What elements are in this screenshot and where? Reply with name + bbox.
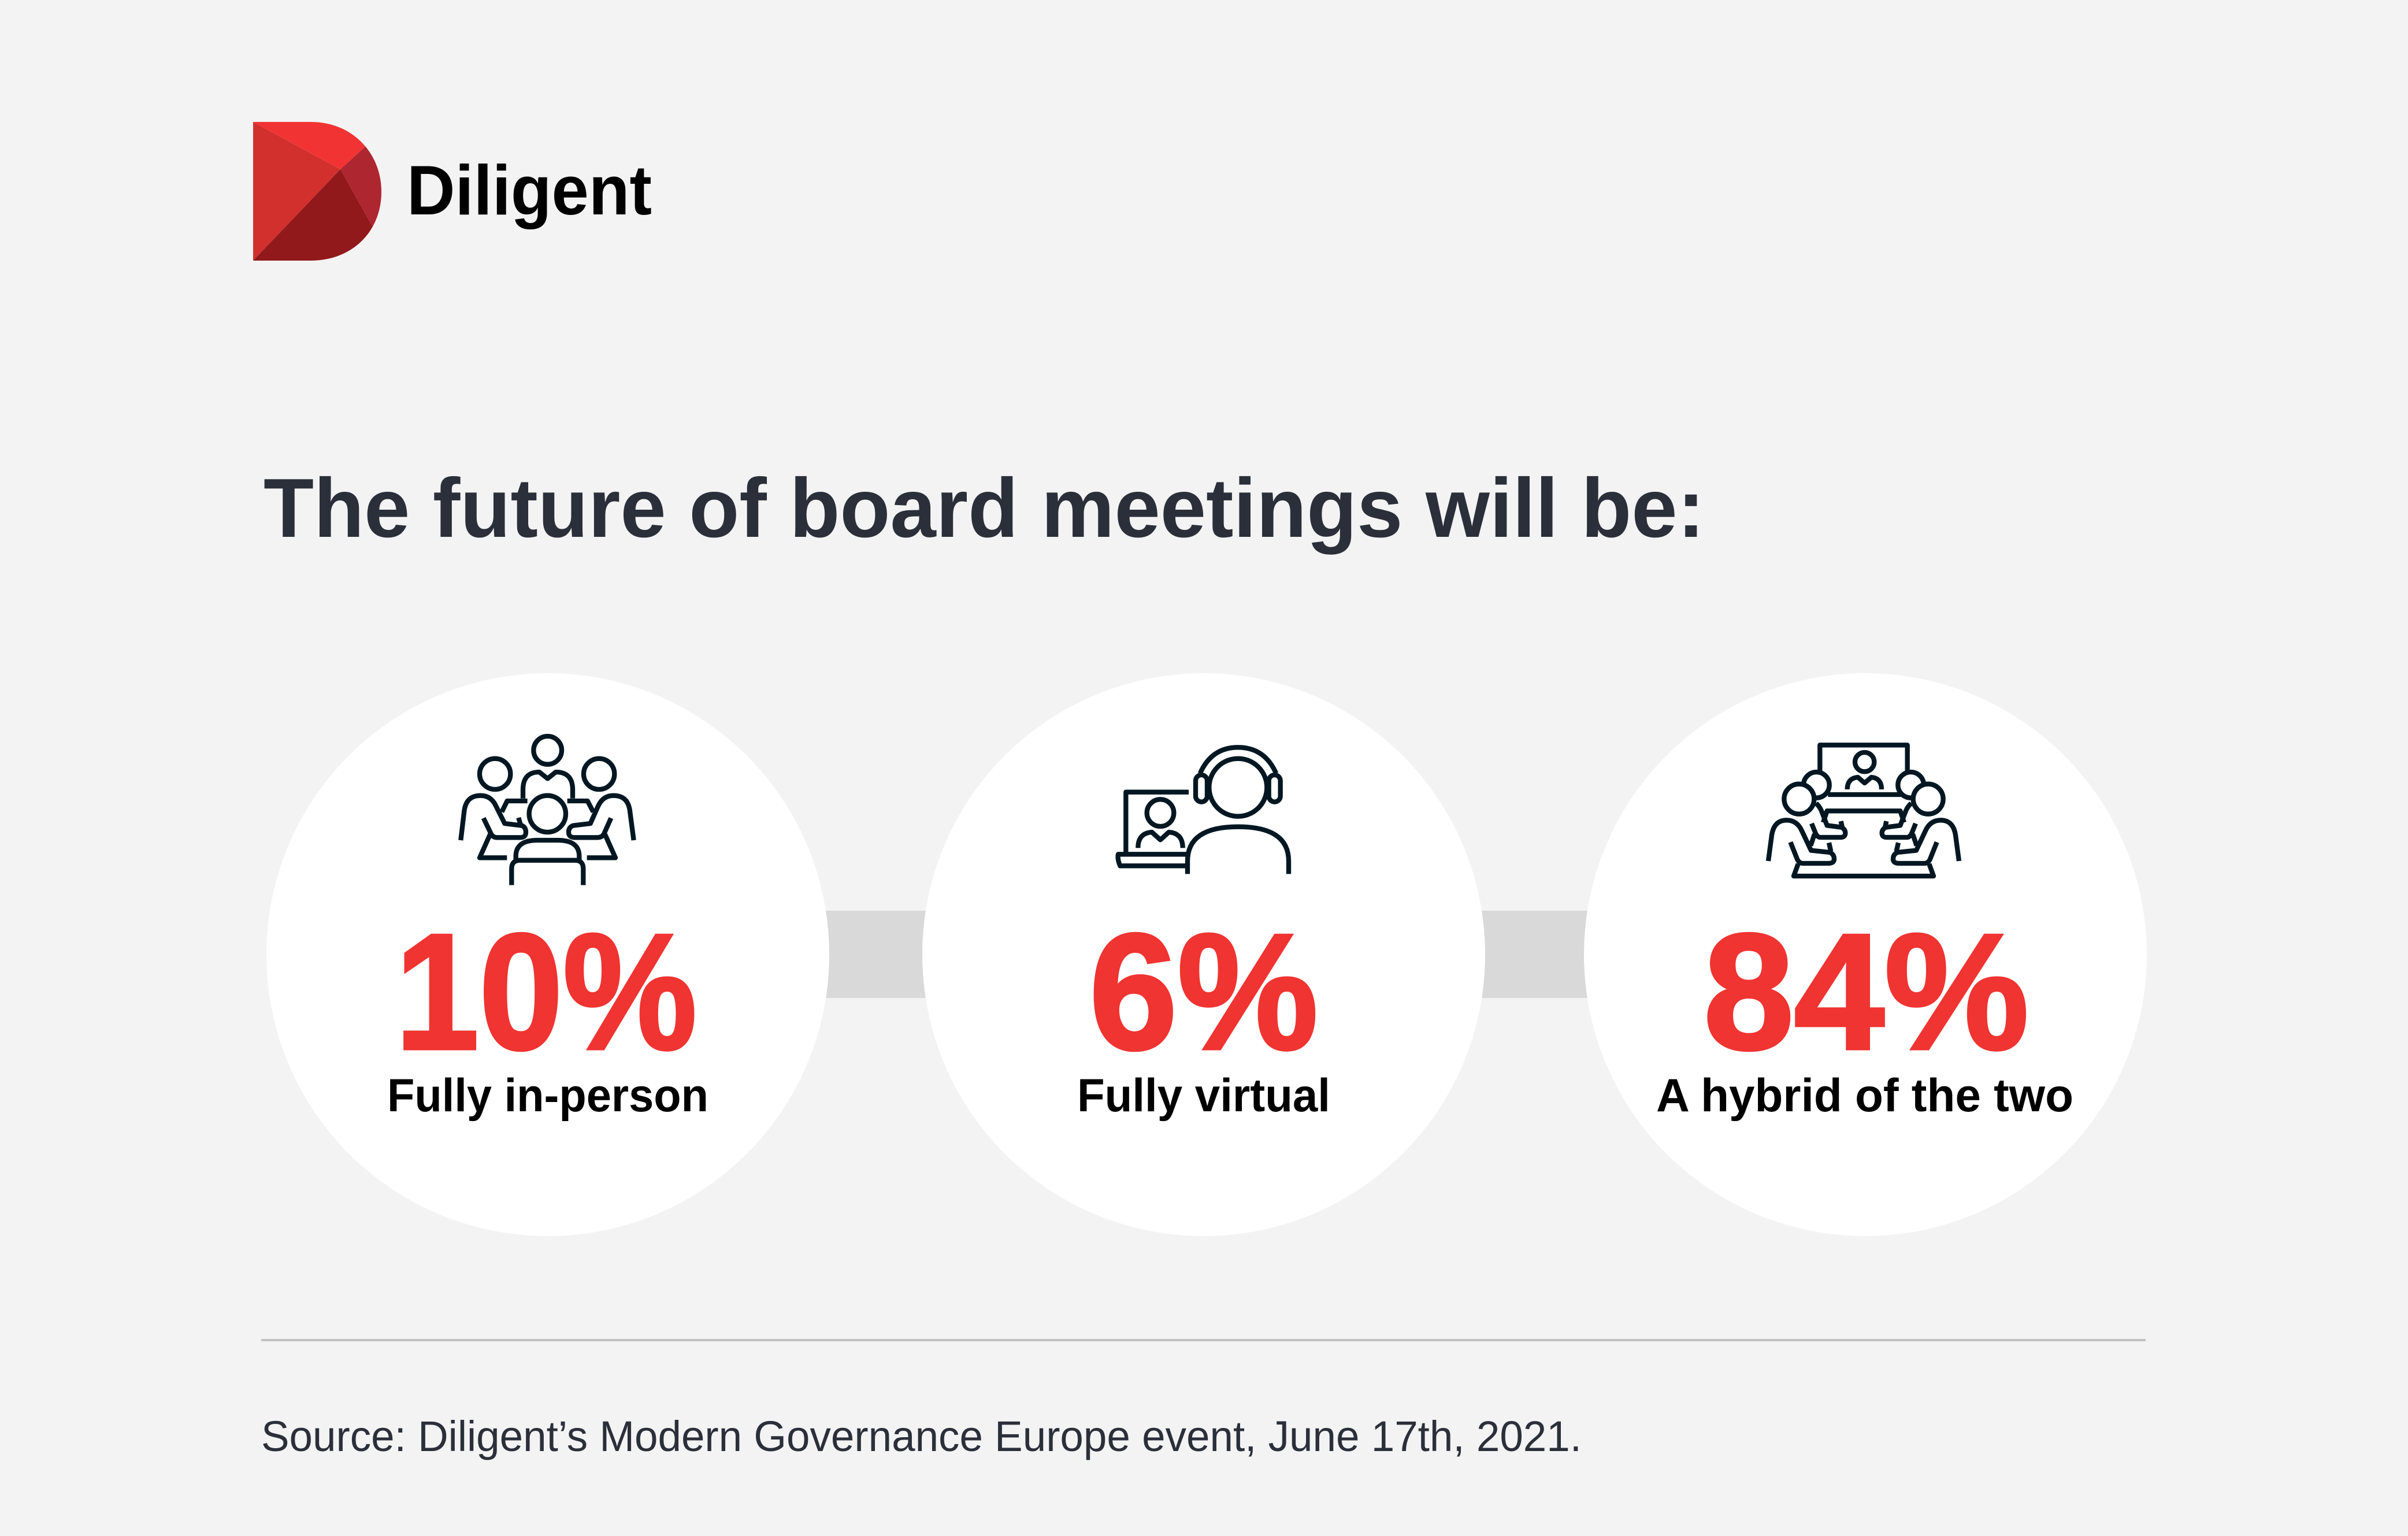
icon: person with headset and laptop <box>1118 747 1289 874</box>
panel: fully in-person <box>266 673 829 1236</box>
icon: red faceted D mark <box>253 122 381 261</box>
connector bar: in-person to virtual <box>809 911 936 998</box>
stat: 10%: 10% <box>395 899 697 1084</box>
infographic canvas <box>253 122 2147 1460</box>
connector bar: virtual to hybrid <box>1474 911 1601 998</box>
panel: fully virtual <box>922 673 1485 1236</box>
source note: Source: Diligent’s Modern Governance Europe event, June 17th, 2021. <box>261 1412 1582 1460</box>
divider line <box>261 1339 2146 1341</box>
logo: Diligent <box>253 122 651 261</box>
stat: 84%: 84% <box>1704 899 2029 1084</box>
icon: people around a table <box>461 736 634 885</box>
stat: 6%: 6% <box>1089 899 1318 1084</box>
logo wordmark: Diligent <box>407 151 652 229</box>
icon: people at table with video screen <box>1768 745 1959 876</box>
title: The future of board meetings will be: <box>264 461 1705 555</box>
label: Fully virtual: Fully virtual <box>1077 1070 1330 1122</box>
label: A hybrid of the two: A hybrid of the two <box>1656 1070 2073 1122</box>
panel: hybrid <box>1584 673 2147 1236</box>
label: Fully in-person: Fully in-person <box>387 1070 708 1122</box>
